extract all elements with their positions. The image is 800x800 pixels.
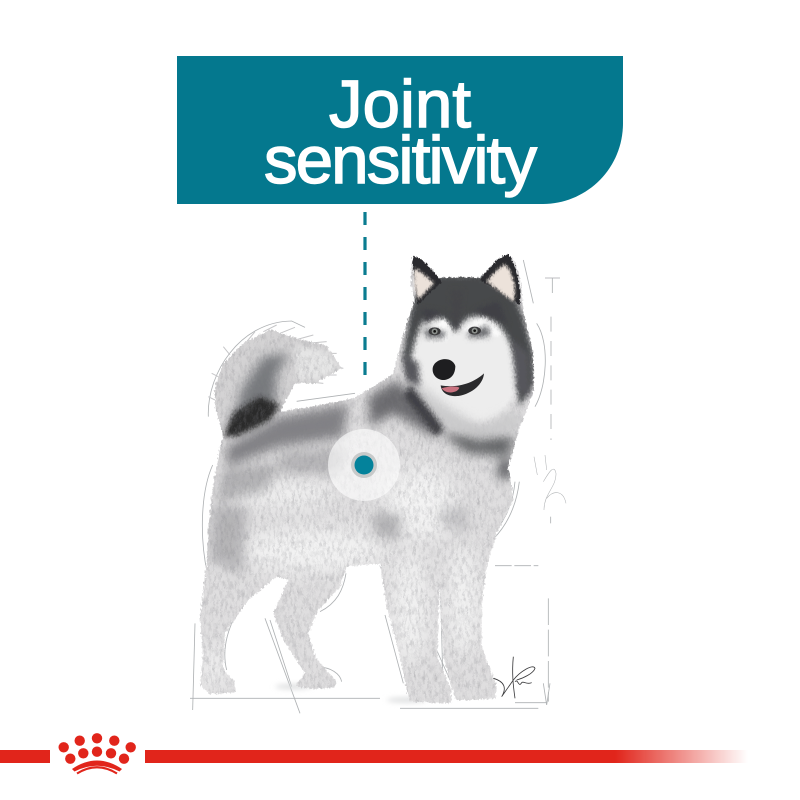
- ring: [351, 452, 377, 478]
- mouth: [441, 373, 484, 396]
- nose: [433, 359, 455, 380]
- dashed connector line: [363, 212, 367, 378]
- heading: Joint sensitivity: Joint: [329, 67, 471, 142]
- banner shape: [177, 56, 623, 204]
- tail: [215, 329, 342, 437]
- illustration: dog: [190, 250, 566, 717]
- red stripe right: [145, 750, 748, 763]
- logo: crown: [58, 733, 136, 774]
- signature: [493, 657, 535, 698]
- sketch lines around the dog: [190, 260, 566, 713]
- tail strands: [208, 325, 343, 400]
- floor shadows: [275, 684, 427, 702]
- dark saddle markings: [210, 380, 515, 573]
- eyes: [429, 327, 481, 335]
- title banner: [177, 56, 623, 204]
- dog fur body: [200, 254, 534, 704]
- lighter belly and legs: [203, 467, 478, 690]
- dot: [354, 456, 374, 474]
- halo: [328, 429, 400, 501]
- joint marker: [328, 429, 400, 501]
- head: [402, 253, 534, 440]
- red stripe left: [0, 750, 50, 763]
- fur texture: [200, 266, 533, 704]
- heading: Joint sensitivity: sensitivity: [264, 123, 538, 198]
